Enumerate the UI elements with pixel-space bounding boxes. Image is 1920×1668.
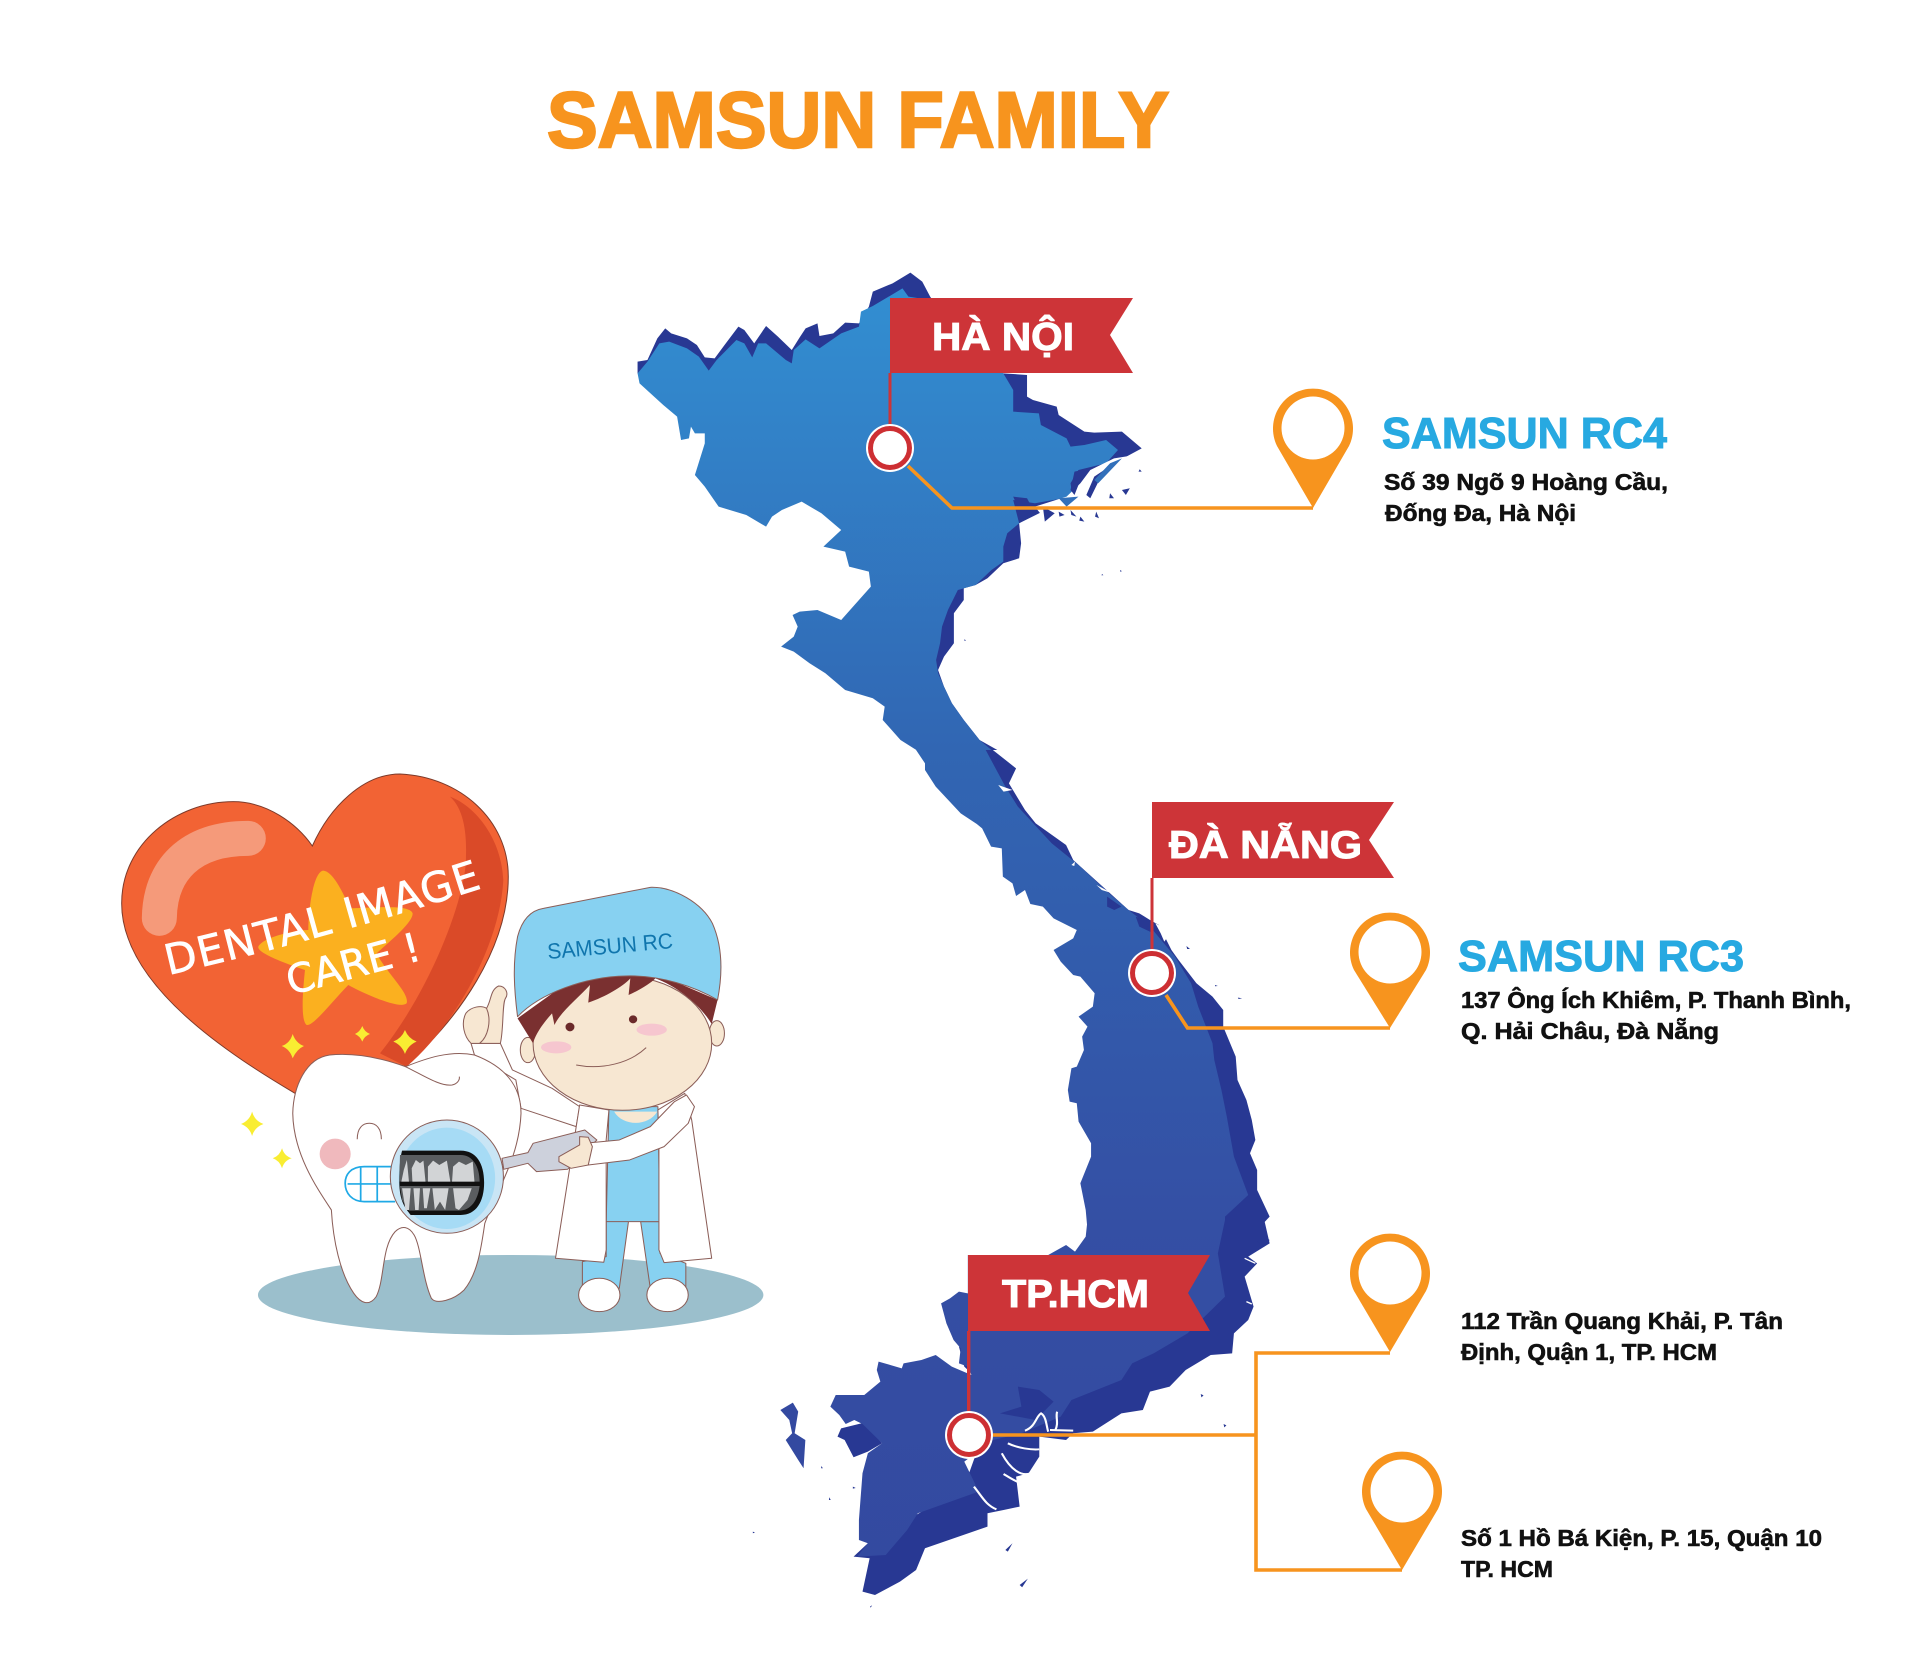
icon: location pin HCM 1 (1350, 1234, 1430, 1352)
text block: HCM address 2: TP. HCM (1461, 1556, 1553, 1582)
text block: HCM address 1: Định, Quận 1, TP. HCM (1461, 1339, 1717, 1365)
text block: Samsun RC4: Số 39 Ngõ 9 Hoàng Cầu, (1384, 469, 1668, 495)
connector: Hà Nội to Samsun RC4 (908, 466, 1313, 508)
icon: location pin RC3 (1350, 913, 1430, 1028)
tooth character (293, 1053, 521, 1303)
dentist arm holding magnifier (585, 1095, 694, 1165)
connector: Đà Nẵng to Samsun RC3 (1166, 995, 1390, 1028)
text block: HCM address 1: 112 Trần Quang Khải, P. Tân (1461, 1308, 1783, 1334)
text block: Samsun RC3: 137 Ông Ích Khiêm, P. Thanh Bình, (1461, 986, 1851, 1013)
text block: Samsun RC4 (1382, 409, 1668, 526)
text block: HCM address 2 (1461, 1525, 1822, 1582)
ground shadow (258, 1255, 763, 1335)
marker: Hà Nội flag and pin (866, 298, 1133, 472)
dentist head (520, 1037, 535, 1063)
heart with slogan (121, 774, 509, 1094)
illustration: heart, tooth and dentist (121, 774, 764, 1335)
connector: TP.HCM to two clinics (993, 1353, 1402, 1570)
marker: Đà Nẵng flag and pin: ĐÀ NẴNG (1169, 823, 1362, 867)
dentist scrubs (606, 1107, 660, 1222)
dentist character and tooth (241, 887, 724, 1312)
marker: TP.HCM flag and pin (945, 1255, 1210, 1459)
dentist legs (582, 1221, 629, 1288)
dentist raised arm (471, 1043, 580, 1127)
text block: Samsun RC4: SAMSUN RC4 (1382, 409, 1668, 458)
map of Vietnam (638, 273, 1270, 1608)
text block: Samsun RC3: Q. Hải Châu, Đà Nẵng (1461, 1017, 1719, 1044)
dentist cap (514, 887, 721, 1017)
magnifier lens with x-ray (390, 1120, 503, 1233)
cap label: SAMSUN RC (546, 928, 674, 964)
icon: location pin RC4 (1273, 389, 1353, 508)
icon: location pin HCM 2 (1362, 1452, 1442, 1570)
marker: TP.HCM flag and pin: TP.HCM (1002, 1273, 1149, 1316)
text block: Samsun RC3: SAMSUN RC3 (1458, 932, 1744, 981)
marker: Hà Nội flag and pin: HÀ NỘI (932, 314, 1074, 359)
heart with slogan: CARE ! (281, 925, 426, 1005)
text block: HCM address 1 (1461, 1308, 1783, 1365)
magnifier handle (502, 1130, 597, 1172)
text block: Samsun RC4: Đống Đa, Hà Nội (1385, 500, 1576, 526)
title: SAMSUN FAMILY (547, 75, 1169, 164)
heart with slogan: DENTAL IMAGE (165, 860, 480, 974)
text block: HCM address 2: Số 1 Hồ Bá Kiện, P. 15, Quận 10 (1461, 1525, 1822, 1551)
dentist coat (555, 1105, 609, 1262)
text block: Samsun RC3 (1458, 932, 1851, 1044)
marker: Đà Nẵng flag and pin (1128, 802, 1394, 997)
